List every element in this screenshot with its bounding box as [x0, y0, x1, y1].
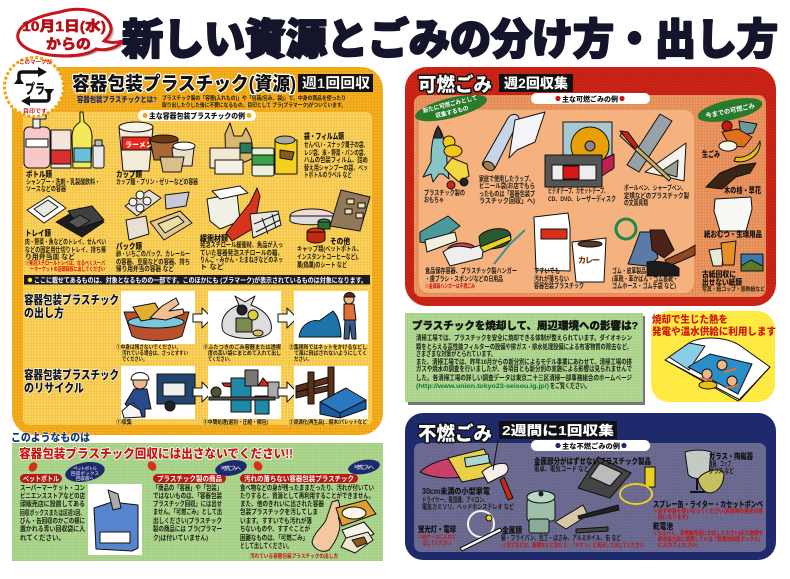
text: non recyclable paper [702, 269, 765, 293]
text: bags and films [304, 131, 368, 179]
text: trays: ※発泡スチロールトレイは、なるべくスーパ [25, 259, 105, 267]
captions: recycling: ③資源化(再生品)…擬木/パレットなど [289, 418, 367, 426]
column: plastic goods: ではないものは、「容器包装 [153, 491, 222, 500]
text: dirty pouches: すすいでも [534, 267, 560, 275]
icon: pots and metal [527, 491, 619, 533]
text: sprays and batteries [653, 499, 763, 549]
text: non recyclable paper: 出せない紙類 [702, 277, 742, 287]
column: plastic goods: ません。「可燃ごみ」として出 [153, 507, 222, 516]
note bar [24, 275, 370, 284]
arrow [193, 308, 212, 328]
panel: burnable waste [405, 67, 776, 306]
note bar: ここに載せてあるものは、対象となるものの一部です。このほかにも (プラマーク)が表示されているものは対象になります。 [34, 276, 367, 284]
captions: recycling: ②中間処理(選別・圧縮・梱包) [203, 418, 268, 426]
text: explanation: (http://www.union.tokyo23-seisou.lg.jp/) [416, 383, 549, 390]
label pill: burnable examples [531, 93, 650, 104]
text: explanation: ガスや焼水の調査を行いましたが、各項目とも新分別の実施による影響は見られませんで [416, 364, 632, 373]
text: trays: り用弁当皿 など [25, 252, 75, 261]
text: small appliances [422, 486, 514, 511]
badge: twice a week: 週2回収集 [504, 75, 569, 91]
text: bags and films: トボトルのラベル など [304, 170, 352, 179]
column: PET bottles [20, 459, 142, 555]
text: cushioning: ト など [200, 262, 224, 271]
text: what is container plastic: プラスチック製の「容器(入れもの)」や「包装(包み、袋)」で、中身の商品を使ったり [162, 94, 346, 102]
label: existing burnable items: 今までの可燃ごみ [705, 101, 756, 120]
column: dirty plastic: 汚れている容器包装プラスチックの出し方 [250, 552, 338, 560]
text: glass: グラス など [709, 466, 734, 475]
arrow [193, 382, 212, 402]
column: PET bottles: 置かれる青い回収袋に入 [20, 524, 85, 533]
text: toys [424, 188, 465, 204]
photo: collection truck [121, 366, 195, 419]
panel: effect of burning plastics [405, 313, 645, 405]
column: dirty plastic: います。すすいでも汚れが落 [240, 516, 312, 525]
captions: recycling: ①収集 [116, 418, 132, 426]
text: cups: カップ類 [116, 169, 142, 179]
label pill: main examples: 主な容器包装プラスチックの例 [149, 110, 245, 120]
text: heat use: 発電や温水供給に利用します [652, 325, 776, 338]
captions: how to put out: でください。 [122, 355, 147, 363]
icon: plastic mark badge: プラ [25, 81, 45, 97]
text: household goods: 食品保存容器、プラスチック製ハンガー [425, 266, 517, 275]
text: trays: 肉・野菜・魚などのトレイ、せんべい [25, 237, 106, 246]
text: cushioning: ていた容器発泡スチロールの箱、 [200, 248, 283, 257]
text: inseparable plastics: 金属部分がはずせないプラスチック製品 [534, 456, 651, 466]
column: plastic goods [146, 458, 248, 542]
text: bags and films: ハムの包装フィルム、詰め [304, 155, 368, 164]
photo: net at collection point [294, 291, 368, 344]
icon: paper cups and photo [709, 241, 763, 271]
text: cushioning [200, 233, 283, 271]
text: toys: プラスチック製の [424, 188, 465, 197]
label: new burnable items [413, 89, 489, 127]
text: sprays and batteries: 乾電池 [653, 521, 673, 531]
text: toys: おもちゃ [424, 196, 444, 204]
icon: small appliances [420, 440, 513, 500]
text: wrap: ったものは「容器包装プ [479, 189, 535, 198]
column: dirty plastic: 困難なものは、「可燃ごみ」 [240, 533, 308, 542]
text: household goods [425, 266, 517, 290]
icon: plastic mark badge: 目印です [23, 107, 48, 115]
icon: dirty bottle and trays [312, 500, 376, 553]
text: bags and films: 替え用シャンプーの袋、ペッ [304, 163, 368, 172]
badge: every two weeks [499, 421, 617, 439]
text: dirty pouches: 容器包装プラスチック [534, 281, 584, 290]
text: inseparable plastics [534, 456, 651, 473]
column: dirty plastic: として出してください。 [240, 541, 292, 550]
captions: how to put out: ①中身は残さないでください。 [116, 343, 181, 351]
text: explanation: 類をとらえる高性能フィルターの設備や排ガス・排水処理設備による有害物質の除去など、 [416, 342, 632, 351]
text: tapes [548, 186, 616, 203]
text: lamps: ※紙ケースに入れて [418, 533, 456, 541]
text: diaper: 紙おむつ・生理用品 [704, 229, 762, 239]
heading: container plastics: 容器包装プラスチック(資源) [72, 72, 296, 95]
text: what is container plastic: 容器包装プラスチックとは? [77, 94, 157, 104]
icon: cups [119, 122, 195, 172]
column: plastic goods: 「商品の「容器」や「包装」 [153, 483, 222, 492]
column: dirty plastic: 包装プラスチックを汚してしま [240, 507, 318, 516]
label: existing burnable items [696, 93, 764, 127]
heading: do not put out: 容器包装プラスチック回収には出さないでください!! [19, 446, 293, 461]
text: tapes: ビデオテープ、カセットテープ、 [548, 186, 608, 195]
column: plastic goods: プラスチック回収」には出せ [153, 499, 222, 508]
icon: plastic mark badge: このマークが [19, 58, 52, 66]
text: branches: 木の枝・草花 [724, 185, 761, 195]
heading: items not to put out: このようなものは [11, 431, 90, 444]
text: trays: などの固定用仕切りトレイ、持ち帰 [25, 245, 106, 254]
text: wrap: ラスチック回収」へ) [479, 196, 535, 205]
icon: net collection bag [88, 484, 142, 555]
heading: how to put out: の出し方 [24, 305, 64, 320]
text: explanation: した。各清掃工場の詳しい調査データは東京二十三区清掃一部事務組合のホームページ [416, 373, 632, 382]
icon: toys [423, 126, 469, 189]
text: lamps [418, 524, 456, 547]
icon: fluorescent lamp [460, 511, 502, 551]
text: trays: ーマーケットの店頭回収に出してください [30, 265, 105, 273]
column: dirty plastic: ちないものや、すすぐことが [240, 524, 310, 533]
text: glass: ガラス・陶磁器 [709, 451, 753, 461]
label: new burnable items: 収集するもの [435, 104, 469, 120]
captions: how to put out: ださい。 [294, 355, 312, 363]
column: PET bottles: ペットボトル [73, 465, 98, 471]
captions: how to put out: て風に飛ばされないようにしてく [294, 349, 367, 357]
icon: plastic mark badge [4, 58, 64, 116]
panel: non-burnable waste [405, 413, 776, 560]
captions: how to put out: ②ふたつきのごみ容器または透視 [203, 343, 281, 351]
text: small appliances: 電気カミソリ、ヘッドホンステレオ など [422, 502, 514, 511]
text: other plastics: 菓(偽菓)のシート など [297, 260, 347, 269]
column: dirty plastic: 可燃ごみへ [354, 464, 374, 471]
text: small appliances: ドライヤー、電話機、アイロン、 [422, 495, 488, 504]
text: other plastics: その他 [330, 236, 350, 246]
heading: burnable waste: 可燃ごみ [418, 73, 492, 96]
text: explanation [416, 333, 632, 390]
icon: glass [685, 450, 724, 493]
icon: wrap [482, 112, 545, 172]
title: 新しい資源とごみの分け方・出し方 [122, 16, 778, 63]
text: glass: 食器、コップ [709, 459, 731, 468]
text: packs: の容器、豆腐などの容器、持ち [116, 257, 190, 266]
panel: heat used for power [651, 311, 776, 402]
text: food waste: 生ごみ [702, 149, 720, 159]
icon: cups: ラーメン [125, 140, 153, 149]
column: dirty plastic: 食べ物などの身が残ったままだったり、汚れが付いてい [240, 483, 374, 492]
text: packs [116, 241, 190, 273]
captions: how to put out: 汚れている場合は、さっとすすい [122, 349, 188, 357]
text: what is container plastic: 取り出したりした後に不要になるもの。目印として プラ(プラマーク)がついています。 [162, 101, 346, 109]
photo: transparent bag [208, 291, 281, 344]
badge: every two weeks: 2週間に1回収集 [502, 423, 614, 438]
heading: how to put out [24, 292, 119, 320]
column: PET bottles: 回収ボックスまたは区週1回、 [20, 508, 85, 517]
text: explanation: また、清掃工場では、昨年10月からの新分別によるモデル事業にあわせて、清掃工場の排 [416, 357, 632, 366]
callout: 10月1日(水)からの: からの [46, 36, 91, 52]
captions: how to put out: てください。 [208, 355, 233, 363]
text: non recyclable paper: 写真・紙コップ・感熱紙など [702, 285, 765, 293]
text: stationery [624, 183, 689, 207]
heading: recycling: のリサイクル [24, 381, 84, 395]
text: stationery: の文房具類 [624, 198, 648, 207]
text: wrap: ビニール袋(お店でもら [479, 181, 535, 190]
icon: food waste [719, 121, 760, 162]
text: packs: 帰り用弁当の容器 など [116, 264, 174, 273]
text: metals: ※包丁などは、紙類などに包んで、「キケン」と表示して出してください [502, 541, 644, 549]
column: PET bottles: 回収ボックス [71, 470, 100, 477]
icon: bottles [24, 112, 104, 168]
captions: recycling [116, 418, 367, 426]
text: bottles [26, 169, 100, 193]
label pill: burnable examples: 主な可燃ごみの例 [562, 94, 618, 104]
photo: recycled pallet and fence [294, 366, 368, 419]
icon: cushioning [207, 186, 281, 241]
column: dirty plastic: 汚れの落ちない容器包装プラスチック [244, 474, 354, 483]
icon: CD and video tape [545, 122, 614, 187]
column: PET bottles: スーパーマーケット・コン [20, 484, 85, 492]
text: lamps: 蛍光灯・電球 [418, 524, 456, 534]
label: new burnable items: 新たに可燃ごみとして [422, 93, 478, 115]
icon: packs [125, 190, 192, 240]
text: other plastics [297, 236, 362, 269]
text: glass [709, 451, 753, 475]
text: small appliances: 30cm未満の小型家電 [422, 486, 490, 496]
text: lamps: 出してください [423, 539, 451, 547]
callout: 10月1日(水)からの [18, 9, 126, 58]
text: heat use [652, 313, 776, 338]
text: stationery: ボールペン、シャープペン、 [624, 183, 686, 192]
text: household goods: ※金属製ハンガーは不燃ごみ [425, 282, 475, 290]
column: plastic goods: ク)は付いていません) [153, 533, 208, 542]
badge: twice a week [499, 74, 573, 92]
text: metals [501, 525, 644, 549]
text: trays [25, 228, 106, 273]
text: other plastics: キャップ類(ペットボトル、 [297, 244, 362, 253]
text: inseparable plastics: 電卓、電気コード など [534, 464, 589, 473]
heading: non-burnable waste: 不燃ごみ [418, 422, 492, 445]
arrow [278, 308, 297, 328]
text: sprays and batteries: に入れてください) [658, 541, 698, 549]
text: other plastics: インスタントコーヒーなど)、 [297, 252, 362, 261]
icon: swimming pool [665, 338, 770, 401]
icon: dirty pouches [534, 213, 606, 282]
column: dirty plastic [240, 457, 381, 560]
text: wrap [479, 174, 535, 205]
text: dirty pouches [534, 267, 584, 290]
label pill: non-burnable examples [531, 440, 650, 451]
column: plastic goods: 可燃ごみへ [221, 465, 241, 472]
icon: diaper [714, 197, 752, 231]
column: plastic goods: プラスチック製の商品 [157, 474, 222, 483]
text: cushioning: 緩衝材類 [200, 233, 228, 243]
text: bottles: ソースなどの容器 [26, 184, 66, 193]
column: PET bottles: ビニエンスストアなどの店 [20, 491, 85, 500]
text: bags and films: せんべい・スナック菓子の袋、 [304, 140, 368, 149]
text: sprays and batteries: 因になります) [658, 514, 688, 521]
photo: rinse in basin [121, 291, 195, 344]
text: wrap: 家庭で使用したラップ、 [479, 174, 534, 183]
heading: burning plastics: プラスチックを焼却して、周辺環境への影響は? [412, 319, 638, 332]
arrow [278, 382, 297, 402]
icon: other plastics [290, 190, 370, 243]
text: sprays and batteries: 都市協力店に設置している「乾電池回収ボックス」 [658, 535, 763, 543]
icon: household goods [420, 216, 525, 266]
text: packs: 卵・いちごのパック、カレールー [116, 249, 190, 258]
text: metals: 金属類 [502, 525, 522, 535]
text: rubber and leather goods [612, 266, 678, 290]
heading: recycling [24, 367, 119, 395]
icon: calculator and power strip [578, 457, 655, 504]
text: dirty pouches: 汚れが落ちない [534, 274, 569, 283]
icon: rubber and leather goods [616, 219, 695, 276]
column: dirty plastic: また、他のきれいに出された容器 [240, 499, 324, 508]
text: bags and films: 袋・フィルム類 [304, 131, 344, 141]
text: household goods: ・歯ブラシ・スポンジなどの日用品 [425, 274, 503, 283]
text: explanation: 清掃工場では、プラスチックを安全に焼却できる体制が整えられています。ダイオキシン [416, 333, 632, 342]
heading: how to put out: 容器包装プラスチック [24, 292, 119, 307]
label pill: non-burnable examples: 主な不燃ごみの例 [562, 442, 620, 450]
text: bottles: シャンプー・洗剤・乳製酸飲料・ [26, 177, 100, 186]
column: dirty plastic: たりすると、資源として再利用することができません。 [240, 491, 374, 500]
panel: container plastics [12, 67, 383, 435]
photo: treatment plant [208, 366, 281, 419]
text: non recyclable paper: 古紙回収に [702, 269, 736, 279]
text: trays: トレイ類 [25, 228, 51, 238]
text: cushioning: りんご・みかん・たまねぎなどのネッ [200, 255, 283, 264]
text: sprays and batteries: ※なるべく、家電販売店にお出しください(区立施設や [653, 529, 763, 537]
badge: weekly collection: 週1回回収 [302, 75, 370, 91]
text: bottles: ボトル類 [26, 169, 52, 179]
text: cushioning: 発泡スチロール緩衝材、魚品が入っ [200, 240, 283, 249]
text: tapes: CD、DVD、レーザーディスク [548, 194, 616, 203]
panel: not for plastic collection [12, 443, 383, 561]
text: packs: パック類 [116, 241, 142, 251]
captions: how to put out [116, 343, 367, 363]
heading: recycling: 容器包装プラスチック [24, 367, 119, 382]
text: rubber and leather goods: ゴム・皮革製品 [612, 266, 646, 275]
column: PET bottles: びん・缶回収のかごの横に [20, 516, 85, 525]
column: plastic goods: 出しください(プラスチック [153, 516, 222, 525]
text: cups [116, 169, 198, 186]
icon: dirty pouches: カレー [578, 256, 600, 265]
text: stationery: 定規などのプラスチック製 [624, 191, 689, 200]
text: cups: カップ麺・プリン・ゼリーなどの容器 [116, 177, 198, 186]
column: PET bottles: 回収袋へ [76, 475, 94, 482]
captions: how to put out: ③集積所ではネットをかけるなどし [289, 343, 367, 351]
column: PET bottles: れてください。 [20, 533, 65, 542]
icon: branches [706, 163, 756, 189]
icon: bags and films [210, 123, 297, 176]
callout: 10月1日(水)からの: 10月1日(水) [22, 18, 106, 34]
text: rubber and leather goods: ゴムホース・ゴム手袋 など) [612, 281, 676, 290]
text: heat use: 焼却で生じた熱を [652, 313, 728, 326]
column: PET bottles: ペットボトル [23, 474, 59, 483]
text: rubber and leather goods: (革靴・革かばん・ゴム長靴・ [612, 274, 678, 283]
icon: trays [27, 196, 104, 237]
captions: how to put out: 度の高い袋にまとめて入れて出し [208, 349, 281, 357]
column: plastic goods: 製の商品には プラ(プラマー [153, 524, 222, 533]
text: sprays and batteries: ※必ず中身を使い切ってください(資源物の発見の原 [653, 507, 763, 515]
icon: stationery [620, 114, 686, 181]
text: explanation: をご覧ください。 [550, 381, 590, 390]
text: explanation: さまざまな対策がとられています。 [416, 349, 496, 358]
text: bags and films: レジ袋、米・野菜・パンの袋、 [304, 148, 368, 157]
text: metals: 鍋・フライパン、包丁・はさみ、アルミホイル、缶 など [501, 533, 621, 542]
text: what is container plastic [77, 94, 346, 109]
column: PET bottles: 頭販売店に設置してある [20, 499, 85, 508]
